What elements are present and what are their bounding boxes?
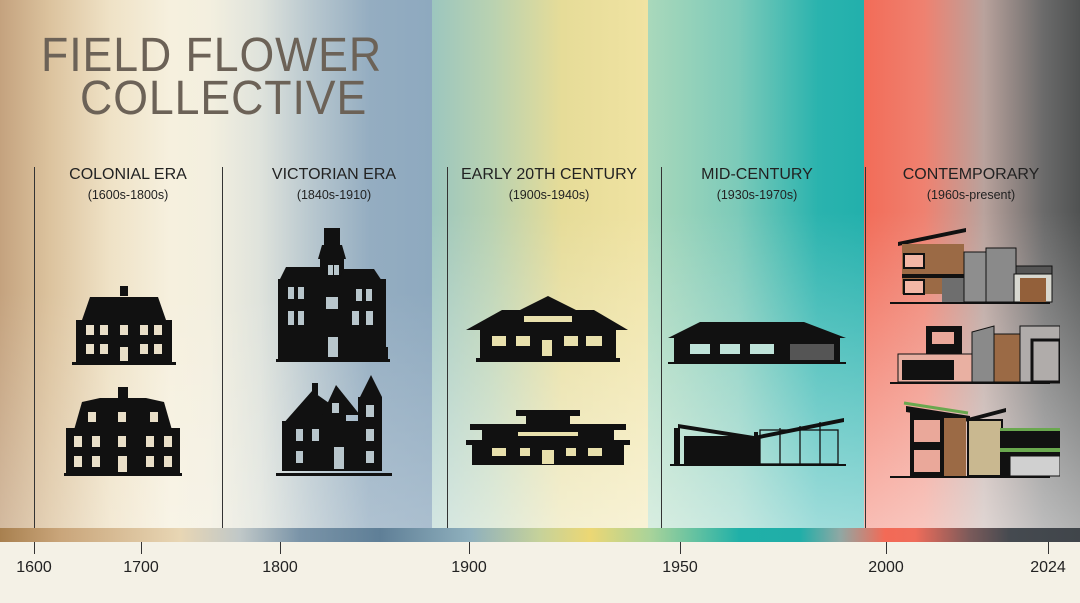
icon: butterfly roof house <box>670 418 846 466</box>
timeline ticks and year labels <box>16 542 1066 576</box>
heading: victorian era: VICTORIAN ERA <box>272 166 396 183</box>
icon: modern house 3 (green roof) <box>890 403 1072 478</box>
text: 1950 <box>662 559 698 576</box>
text: 2024 <box>1030 559 1066 576</box>
victorian houses <box>276 228 392 476</box>
heading: colonial era: COLONIAL ERA <box>69 166 187 183</box>
colonial houses <box>64 286 182 476</box>
icon: second empire house <box>276 228 390 362</box>
text: 2000 <box>868 559 904 576</box>
icon: prairie house <box>466 410 630 465</box>
heading: victorian era <box>272 166 396 202</box>
icon: modern house 2 <box>890 326 1060 384</box>
mid-century houses <box>668 322 846 466</box>
heading: colonial era <box>69 166 187 202</box>
title: COLLECTIVE <box>80 72 367 125</box>
icon: ranch house <box>668 322 846 364</box>
heading: contemporary: CONTEMPORARY <box>903 166 1039 183</box>
heading: victorian era: (1840s-1910) <box>297 188 371 202</box>
background: early 20th <box>432 0 648 528</box>
heading: contemporary <box>903 166 1039 202</box>
text: 1600 <box>16 559 52 576</box>
heading: mid-century: (1930s-1970s) <box>717 188 797 202</box>
heading: mid-century <box>701 166 813 202</box>
icon: gambrel house <box>64 387 182 476</box>
text: 1700 <box>123 559 159 576</box>
text: 1900 <box>451 559 487 576</box>
background: contemporary <box>864 0 1080 528</box>
heading: colonial era: (1600s-1800s) <box>88 188 168 202</box>
divider lines <box>34 167 35 528</box>
icon: queen anne house <box>276 375 392 476</box>
contemporary houses <box>890 228 1060 478</box>
icon: craftsman bungalow <box>466 296 628 362</box>
heading: early 20th century <box>461 166 637 202</box>
background: colonial & victorian <box>0 0 432 528</box>
timeline bar <box>0 528 1080 542</box>
text: 1800 <box>262 559 298 576</box>
icon: georgian house <box>72 286 176 365</box>
heading: early 20th century: (1900s-1940s) <box>509 188 589 202</box>
heading: contemporary: (1960s-present) <box>927 188 1015 202</box>
background: mid-century <box>648 0 864 528</box>
heading: early 20th century: EARLY 20TH CENTURY <box>461 166 637 183</box>
title <box>41 29 382 125</box>
heading: mid-century: MID-CENTURY <box>701 166 813 183</box>
early 20th century houses <box>466 296 630 465</box>
icon: modern house 1 <box>890 228 1052 304</box>
title: FIELD FLOWER <box>41 29 382 82</box>
